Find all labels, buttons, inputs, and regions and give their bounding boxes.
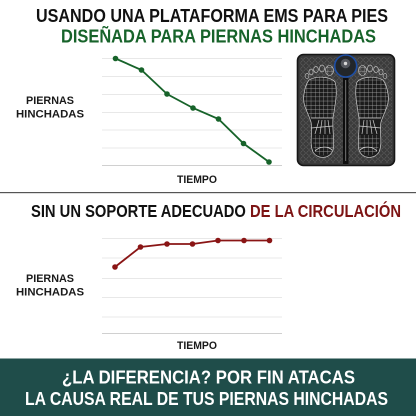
line chart: with platform, swelling falls: [102, 56, 282, 166]
divider: [0, 192, 416, 193]
title: top section: [36, 6, 388, 46]
y axis label: top chart: PIERNAS: [26, 95, 74, 107]
banner: conclusion: ¿LA DIFERENCIA? POR FIN ATACAS: [62, 368, 355, 388]
icon: EMS foot massage mat: [298, 54, 394, 166]
y axis label: bottom chart: PIERNAS: [26, 273, 74, 285]
line chart: without support, swelling stays high: [102, 238, 282, 334]
banner: conclusion: [0, 358, 416, 416]
y axis label: bottom chart: HINCHADAS: [16, 286, 84, 298]
y axis label: top chart: HINCHADAS: [16, 108, 84, 120]
x axis label: bottom chart: TIEMPO: [177, 340, 217, 352]
x axis label: top chart: TIEMPO: [177, 174, 217, 186]
title: top section: DISEÑADA PARA PIERNAS HINCHADAS: [61, 26, 376, 46]
